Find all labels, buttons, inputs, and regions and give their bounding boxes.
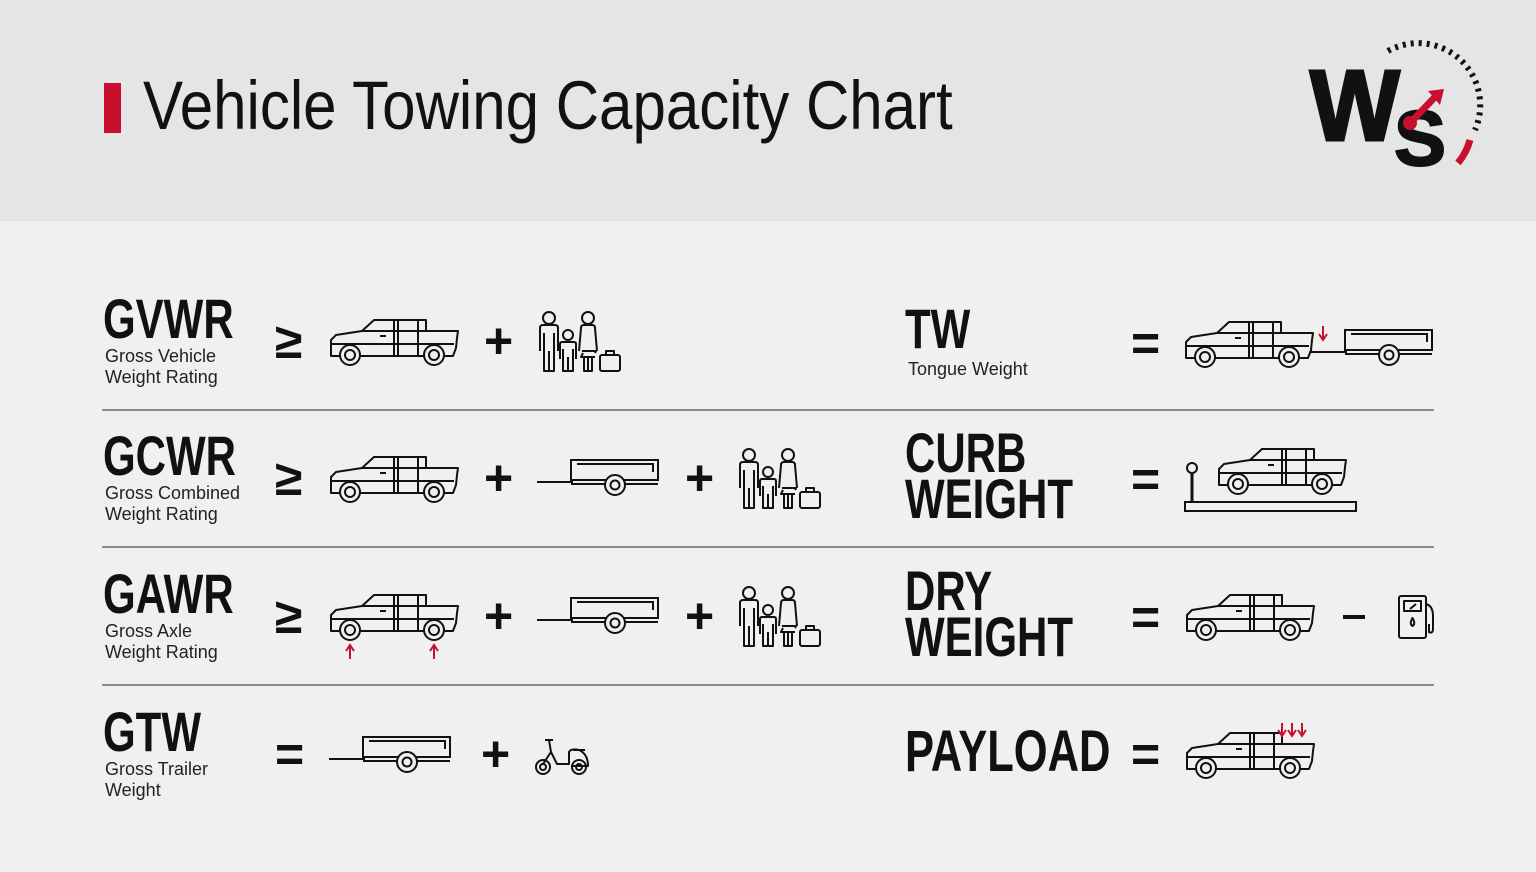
row: GCWR: Gross Combined (105, 483, 240, 503)
icon: truck (1186, 594, 1315, 641)
label DRY WEIGHT: DRY (905, 559, 992, 622)
row: DRY WEIGHT (905, 559, 1434, 668)
symbol minus (1343, 615, 1365, 619)
row: GCWR: Weight Rating (105, 504, 218, 524)
logo: W (1310, 50, 1400, 162)
label DRY WEIGHT (905, 559, 1073, 668)
label GAWR: GAWR (103, 562, 234, 625)
row: GAWR: + (484, 588, 513, 644)
row: GAWR: ≥ (275, 588, 302, 644)
row: GVWR: Gross Vehicle (105, 346, 216, 366)
icon: fuel pump (1398, 595, 1434, 639)
row: PAYLOAD (905, 719, 1315, 784)
label CURB WEIGHT: CURB (905, 421, 1026, 484)
row: GCWR: ≥ (275, 450, 302, 506)
icon: truck (330, 456, 459, 503)
row: GVWR: + (484, 313, 513, 369)
label DRY WEIGHT: WEIGHT (905, 605, 1073, 668)
row: GCWR: + (685, 450, 714, 506)
row: TW (905, 297, 1433, 379)
label TW: TW (905, 297, 970, 360)
logo (1308, 40, 1484, 182)
label CURB WEIGHT (905, 421, 1073, 530)
row: GAWR: Gross Axle (105, 621, 192, 641)
icon: family (539, 311, 621, 372)
title: Vehicle Towing Capacity Chart (143, 67, 953, 144)
symbol: ≥ (275, 313, 302, 369)
row: GTW: = (275, 726, 304, 782)
label PAYLOAD: PAYLOAD (905, 719, 1110, 784)
row: PAYLOAD: = (1131, 726, 1160, 782)
row: GVWR (103, 287, 621, 387)
icon: family (739, 448, 821, 509)
icon: trailer (537, 459, 659, 496)
icon: truck (330, 319, 459, 366)
label GVWR: GVWR (103, 287, 234, 350)
row: GTW (103, 700, 589, 800)
icon: trailer (329, 736, 451, 773)
label CURB WEIGHT: WEIGHT (905, 467, 1073, 530)
row: TW: = (1131, 315, 1160, 371)
row: GVWR: Weight Rating (105, 367, 218, 387)
icon: family (739, 586, 821, 647)
header band (0, 0, 1536, 221)
row: GCWR (103, 424, 821, 524)
icon: truck with load arrows (1186, 723, 1315, 779)
row: DRY WEIGHT: = (1131, 589, 1160, 645)
row: GTW: Weight (105, 780, 161, 800)
logo: S (1394, 94, 1446, 182)
row: GAWR: + (685, 588, 714, 644)
dividers (102, 409, 1434, 410)
row: GTW: Gross Trailer (105, 759, 208, 779)
icon: truck on scale (1184, 448, 1357, 512)
label GCWR: GCWR (103, 424, 236, 487)
row: CURB WEIGHT: = (1131, 451, 1160, 507)
icon: scooter (535, 739, 589, 775)
icon: trailer (537, 597, 659, 634)
row: GAWR: Weight Rating (105, 642, 218, 662)
icon: truck with axle arrows (330, 594, 459, 659)
row: CURB WEIGHT (905, 421, 1357, 530)
row: GAWR (103, 562, 821, 662)
row: GTW: + (481, 726, 510, 782)
icon: truck with trailer and tongue arrow (1185, 321, 1433, 368)
row: TW: Tongue Weight (908, 359, 1028, 379)
label GTW: GTW (103, 700, 201, 763)
row: GCWR: + (484, 450, 513, 506)
